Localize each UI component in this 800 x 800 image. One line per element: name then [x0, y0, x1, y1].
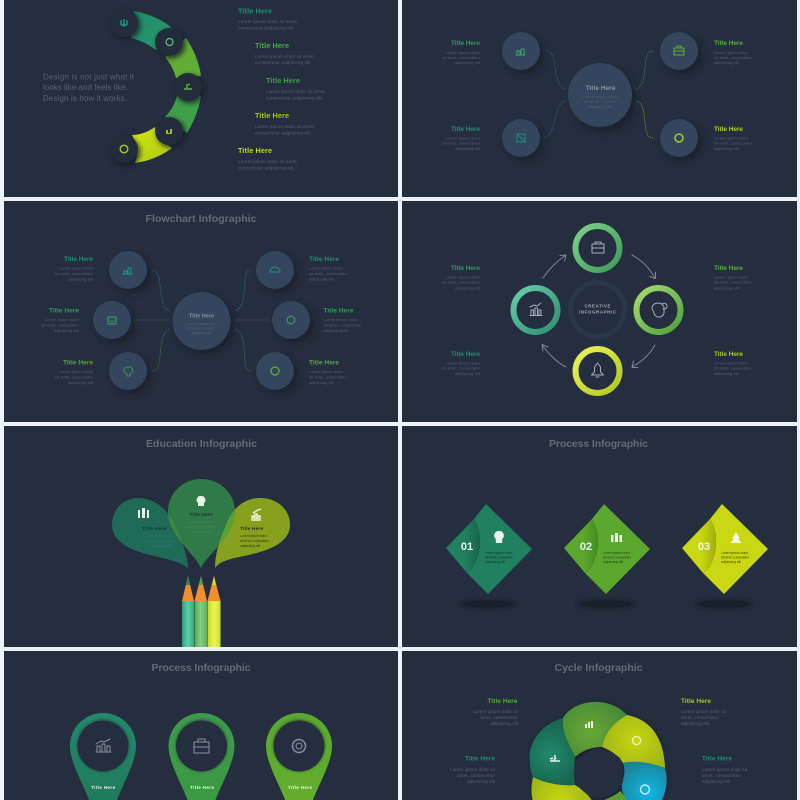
- label top left: amet, consectetur: [480, 715, 518, 720]
- label bottom right: Lorem ipsum dolor: [309, 369, 344, 374]
- quote text: Design is not just what it: [43, 72, 135, 82]
- text block 3: consectetur adipiscing elit.: [266, 96, 323, 100]
- heading: Process Infographic: [152, 662, 251, 674]
- node icons: [516, 46, 684, 142]
- text block 4: consectetur adipiscing elit.: [255, 130, 312, 136]
- panel background: [4, 201, 398, 422]
- label top left: Title Here: [451, 265, 480, 272]
- node shadows: [97, 255, 314, 394]
- text block 4: [255, 111, 315, 136]
- node circles: [502, 32, 698, 157]
- panel background: [402, 426, 797, 647]
- centre ring: INFOGRAPHIC: [579, 310, 617, 314]
- label mid left: Lorem ipsum dolor sit: [450, 767, 496, 772]
- label top left: Title Here: [64, 256, 93, 263]
- label top right: adipiscing elit: [714, 60, 740, 65]
- label top left: sit amet, consectetur: [55, 271, 94, 276]
- label top right: sit amet, consectetur: [714, 280, 753, 284]
- label top right: Lorem ipsum dolor: [309, 266, 344, 270]
- label bottom left: sit amet, consectetur: [442, 366, 481, 370]
- label top right: Lorem ipsum dolor sit: [681, 709, 727, 714]
- segment left teal: [530, 718, 575, 785]
- label mid right: adipiscing elit: [324, 328, 349, 333]
- panel background: [402, 0, 797, 197]
- panel background: [4, 426, 398, 647]
- text block 2: consectetur adipiscing elit.: [255, 60, 312, 65]
- label top right: [714, 265, 753, 290]
- petal left content: adipiscing elit: [150, 543, 173, 548]
- label top right: [681, 698, 727, 726]
- label top left: Title Here: [451, 40, 480, 47]
- label mid right: Lorem ipsum dolor: [324, 317, 358, 322]
- diamond 1: 01: [461, 541, 473, 553]
- label mid right: [702, 756, 748, 784]
- petal right content: Title Here: [240, 526, 263, 531]
- label top left: Lorem ipsum dolor: [446, 274, 481, 280]
- dotted connectors: [135, 270, 268, 371]
- label mid right: Lorem ipsum dolor sit: [702, 767, 748, 772]
- panel background: [4, 651, 398, 800]
- pin 3: Title Here: [288, 785, 312, 790]
- text block 5: [238, 146, 298, 170]
- panel: flowchart infographic: [4, 201, 398, 422]
- label bottom left: sit amet, consectetur: [442, 140, 481, 146]
- diamond 1: Lorem ipsum dolor: [485, 550, 513, 555]
- text block 5: Lorem ipsum dolor sit amet,: [238, 159, 298, 164]
- ring left: [514, 288, 558, 332]
- label top right: Lorem ipsum dolor: [714, 274, 749, 280]
- centre text: sit amet, consec: [584, 99, 616, 104]
- text block 1: [238, 6, 298, 30]
- diamond 3: 03: [698, 541, 710, 553]
- label top left: [442, 40, 481, 65]
- cycle icons: [550, 721, 650, 794]
- label bottom right: sit amet, consectetur: [714, 140, 753, 146]
- petal right content: Lorem ipsum dolor: [240, 533, 268, 538]
- pin 3: [266, 713, 332, 800]
- petal left content: Lorem ipsum dolor: [146, 533, 174, 538]
- pin 1: Title Here: [91, 785, 115, 790]
- label top right: Title Here: [309, 256, 339, 263]
- text block 1: Lorem ipsum dolor sit amet,: [238, 19, 298, 24]
- label bottom right: Title Here: [714, 351, 743, 358]
- ring top: [576, 226, 620, 270]
- label mid right: Title Here: [702, 756, 732, 762]
- label top left: Lorem ipsum dolor sit: [473, 709, 519, 714]
- cycle shadow: [531, 701, 668, 800]
- label bottom left: adipiscing elit: [455, 146, 481, 151]
- centre text: [186, 314, 218, 335]
- label top left: adipiscing elit: [68, 276, 94, 282]
- text block 4: Lorem ipsum dolor sit amet,: [255, 124, 315, 129]
- diamond 2: adipiscing elit: [603, 559, 624, 564]
- label bottom right: adipiscing elit: [309, 380, 335, 385]
- label bottom left: [442, 126, 481, 151]
- quote text: [43, 72, 135, 103]
- segment upper right yellow: [602, 715, 665, 768]
- panel: education infographic: [4, 426, 398, 647]
- heading: Cycle Infographic: [554, 662, 643, 674]
- centre ring: CREATIVE: [584, 304, 610, 308]
- text block 5: consectetur adipiscing elit.: [238, 166, 295, 170]
- diamond 3: sit amet, consectetur: [721, 554, 750, 560]
- diamond 1: [446, 504, 532, 608]
- label mid right: amet, consectetur: [702, 773, 740, 778]
- label bottom right: Lorem ipsum dolor: [714, 136, 749, 140]
- centre hole: [575, 748, 623, 798]
- ring right: [636, 288, 680, 332]
- label top left: adipiscing elit: [490, 721, 519, 726]
- label bottom left: Title Here: [451, 351, 480, 358]
- label bottom left: [442, 351, 481, 376]
- petal centre content: [186, 496, 217, 534]
- segment blue: [622, 762, 667, 800]
- pin 1: [70, 713, 136, 800]
- panel background: [4, 0, 398, 197]
- label bottom left: [55, 360, 94, 385]
- pin 2: [168, 713, 234, 800]
- pencils: [182, 576, 220, 647]
- label bottom right: [714, 126, 753, 151]
- heading: Education Infographic: [146, 438, 257, 450]
- panel: curved process: [4, 0, 398, 197]
- heading: Flowchart Infographic: [146, 213, 257, 225]
- text block 2: [255, 41, 315, 65]
- label top left: adipiscing elit: [455, 286, 481, 290]
- petal left content: [138, 508, 175, 548]
- label top right: amet, consectetur: [681, 715, 719, 720]
- text block 2: Title Here: [255, 41, 289, 50]
- petal right content: [240, 509, 270, 548]
- label mid left: sit amet, consectetur: [41, 322, 80, 328]
- label mid left: [41, 308, 80, 333]
- label bottom left: Lorem ipsum dolor: [446, 360, 481, 366]
- panel: cycle infographic: [402, 651, 797, 800]
- label top left: sit amet, consectetur: [442, 280, 481, 284]
- label bottom right: [714, 351, 753, 376]
- label bottom left: adipiscing elit: [455, 371, 481, 376]
- centre text: sit amet, consec: [188, 326, 216, 330]
- panel: process diamonds: [402, 426, 797, 647]
- dotted connectors: [540, 51, 653, 138]
- quote text: Design is how it works.: [43, 94, 127, 103]
- diamond 3: [682, 504, 768, 608]
- label bottom right: adipiscing elit: [714, 371, 740, 376]
- text block 4: Title Here: [255, 111, 289, 120]
- panel: process pins: [4, 651, 398, 800]
- petal left content: sit amet, consectetur: [142, 538, 175, 543]
- label bottom right: Lorem ipsum dolor: [714, 360, 749, 366]
- cycle arrows: [542, 255, 656, 368]
- label mid left: adipiscing elit: [54, 328, 80, 333]
- label bottom left: sit amet, consectetur: [55, 374, 94, 380]
- label top right: [309, 256, 348, 282]
- label bottom right: [309, 360, 348, 385]
- pin 2: Title Here: [190, 785, 214, 790]
- node circles: [93, 251, 310, 390]
- petal right content: adipiscing elit: [240, 543, 261, 548]
- label mid left: Title Here: [465, 756, 495, 762]
- label top right: adipiscing elit: [681, 721, 710, 726]
- centre text: Title Here: [189, 314, 214, 320]
- centre text: Lorem ipsum dolor: [582, 94, 619, 99]
- diamond 1: sit amet, consectetur: [485, 554, 514, 560]
- diamond 2: sit amet, consectetur: [603, 554, 632, 560]
- petal centre: [168, 479, 235, 568]
- petal centre content: Title Here: [190, 512, 213, 517]
- diamond 3: adipiscing elit: [721, 559, 742, 564]
- label top right: Title Here: [681, 698, 711, 705]
- panel background: [402, 651, 797, 800]
- quote text: looks like and feels like.: [43, 83, 128, 92]
- label mid left: amet, consectetur: [457, 773, 495, 778]
- label top left: Lorem ipsum dolor: [446, 50, 481, 55]
- node icons: [108, 267, 295, 376]
- label mid left: Title Here: [49, 308, 79, 314]
- petal left: [112, 498, 188, 568]
- petal right content: sit amet, consectetur: [240, 538, 270, 543]
- text block 5: Title Here: [238, 146, 272, 155]
- curved ribbon segments: [131, 11, 201, 163]
- node circles with icons: [110, 9, 205, 167]
- label top left: Title Here: [488, 698, 518, 705]
- diamond 1: adipiscing elit: [485, 559, 506, 564]
- panel background: [402, 201, 797, 422]
- panel: four node mind map: [402, 0, 797, 197]
- diamond 2: 02: [580, 541, 592, 553]
- ring bottom: [576, 349, 620, 393]
- centre text: adipiscing elit: [588, 104, 613, 109]
- label top right: [714, 40, 753, 65]
- label bottom right: adipiscing elit: [714, 146, 740, 151]
- segment bottom green: [600, 791, 628, 800]
- label bottom left: Lorem ipsum dolor: [446, 136, 481, 140]
- label top right: adipiscing elit: [309, 276, 335, 282]
- label top right: Lorem ipsum dolor: [714, 50, 749, 55]
- label bottom right: sit amet, consectetur: [309, 374, 348, 380]
- label bottom right: sit amet, consectetur: [714, 366, 753, 370]
- centre text: Title Here: [586, 85, 616, 92]
- centre text: [582, 85, 619, 109]
- centre ring: [570, 282, 624, 336]
- text block 2: Lorem ipsum dolor sit amet,: [255, 54, 315, 59]
- diamond 2: Lorem ipsum dolor: [603, 550, 631, 555]
- label mid right: [324, 308, 362, 333]
- label top left: adipiscing elit: [455, 60, 481, 65]
- text block 1: consectetur adipiscing elit.: [238, 26, 295, 30]
- petal centre content: Lorem ipsum dolor: [188, 519, 215, 524]
- segment lower left yellow: [532, 777, 593, 800]
- label mid right: sit amet, consectetur: [324, 322, 362, 328]
- label mid left: Lorem ipsum dolor: [45, 317, 80, 322]
- diamond 3: Lorem ipsum dolor: [721, 550, 749, 555]
- label bottom right: Title Here: [714, 126, 743, 133]
- label top left: [473, 698, 519, 726]
- label top right: Title Here: [714, 40, 743, 47]
- label top right: adipiscing elit: [714, 286, 740, 290]
- centre text: adipiscing elit: [192, 330, 212, 335]
- segment top green: [563, 702, 627, 757]
- label bottom right: Title Here: [309, 360, 339, 366]
- panel: ring cycle: [402, 201, 797, 422]
- centre text: Lorem ipsum dolor: [186, 321, 218, 326]
- label top left: [442, 265, 481, 290]
- label top left: [55, 256, 94, 282]
- label mid left: [450, 756, 496, 784]
- label mid right: Title Here: [324, 308, 354, 314]
- text block 3: Title Here: [266, 76, 300, 85]
- node shadows: [506, 36, 702, 161]
- petal overlaps: [168, 510, 235, 546]
- label bottom left: Title Here: [451, 126, 480, 133]
- label bottom left: Title Here: [63, 360, 93, 366]
- text block 1: Title Here: [238, 6, 272, 16]
- diamond 2: [564, 504, 650, 608]
- petal right: [215, 498, 290, 568]
- label mid right: adipiscing elit: [702, 779, 731, 784]
- text block 3: Lorem ipsum dolor sit amet,: [266, 89, 326, 94]
- petal centre content: adipiscing elit: [190, 529, 213, 534]
- text block 3: [266, 76, 326, 100]
- label top right: Title Here: [714, 265, 743, 272]
- label bottom left: Lorem ipsum dolor: [59, 369, 94, 374]
- label top left: Lorem ipsum dolor: [59, 266, 94, 270]
- label mid left: adipiscing elit: [467, 779, 496, 784]
- petal left content: Title Here: [142, 526, 166, 531]
- label top right: sit amet, consectetur: [309, 271, 348, 276]
- label top right: sit amet, consectetur: [714, 55, 753, 60]
- label top left: sit amet, consectetur: [442, 55, 481, 60]
- heading: Process Infographic: [549, 438, 648, 450]
- label bottom left: adipiscing elit: [68, 380, 94, 385]
- petal centre content: sit amet, consectetur: [186, 524, 217, 529]
